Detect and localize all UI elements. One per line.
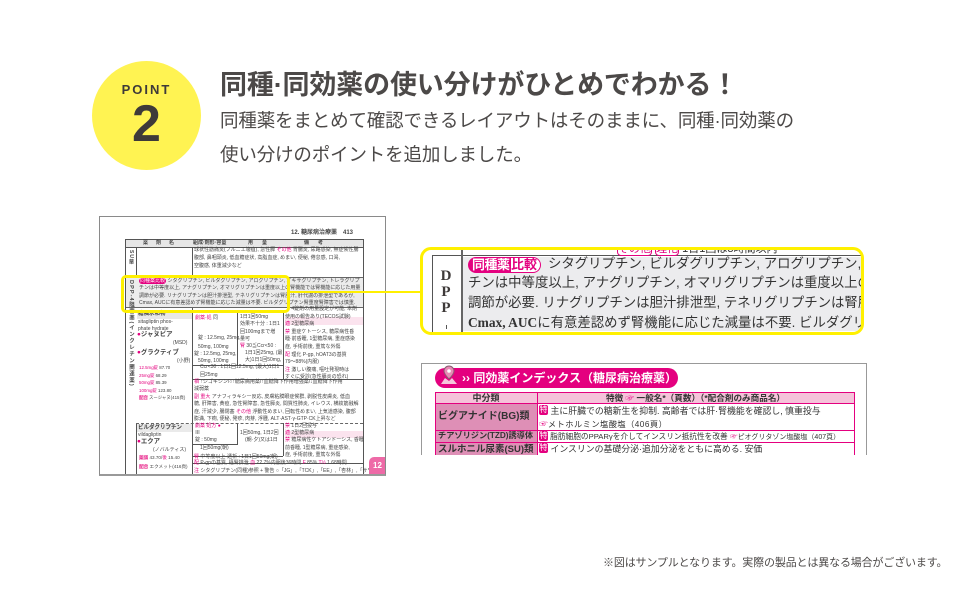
category SU: スルホニル尿素(SU)類 xyxy=(438,444,534,455)
description xyxy=(220,110,794,164)
remarks column xyxy=(285,317,363,325)
panel: book page: 1日1回25mg, (最 xyxy=(245,350,283,356)
header row xyxy=(436,393,854,404)
drug column: vildagliptin xyxy=(138,432,161,438)
panel: drug index xyxy=(421,363,867,455)
comparison text xyxy=(468,256,861,330)
footnote: ※図はサンプルとなります。実際の製品とは異なる場合がございます。 xyxy=(603,557,947,569)
row BG text xyxy=(539,405,821,428)
comparison small text: 同種薬比較 シタグリプチン, ビルダグリプチン, アログリプチン, オキサグリプチン, トレラグリプ xyxy=(140,278,360,284)
panel: book page: 症, 手術前後, 重篤な外傷 xyxy=(285,452,341,458)
drug column: 100mg錠 123.80 xyxy=(139,388,171,393)
vildagliptin usage xyxy=(240,430,279,443)
panel: book page: 症, 汗減少, 腸閉塞 その他 浮動性めまい, 回転性めまい, 上気道感染, 腹部 xyxy=(194,409,356,415)
panel: book page: 注 シタグリプチン(同種)参照 + 警告 ○「JG」,「TCK」,「EE」,「杏林」,「サワイ」 xyxy=(194,468,382,474)
vildagliptin dosage: 劇薬 処方 ● xyxy=(195,423,221,429)
comparison small text: 調節が必要. リナグリプチンは胆汁排泄型, テネリグリプチンは腎胆汁, 肝代謝の排泄型であるが, xyxy=(139,293,355,299)
drug column: ●グラクティブ xyxy=(137,349,179,356)
row SU text: 特 xyxy=(540,443,548,452)
column divider xyxy=(537,393,538,456)
panel: book page: 錠 : 12.5mg, 25mg, xyxy=(194,351,237,357)
comparison tag xyxy=(468,257,541,273)
panel: book page: 使用の報告あり(TECOS試験) xyxy=(285,314,351,320)
panel: book page: 適 2型糖尿病 xyxy=(285,430,314,436)
panel: book page: すぐに受診(急性膵炎の恐れ) xyxy=(285,374,348,380)
panel: book page: 注 激しい腹痛, 嘔吐発現時は xyxy=(285,367,349,373)
panel: book page: 配 P-gpの基質, 経腎排泄 血 22.7%内服後36時間 F 85% T½ 1.68時間 xyxy=(194,460,347,466)
panel: book page: 症, 手術前後, 重篤な外傷 xyxy=(285,344,341,350)
renal dosage line: 回25mg xyxy=(200,372,218,378)
row TZD text: 特 xyxy=(540,431,548,440)
category BG: ビグアナイド(BG)類 xyxy=(438,411,529,422)
page header: 12. 糖尿病治療薬 413 xyxy=(291,230,353,236)
renal dosage line: Ccr<30 : 1日1回12.5mg, (最大)1日1 xyxy=(200,364,279,370)
panel: book page: 大)1日1回50mg, xyxy=(245,357,281,363)
drug column: 12.5mg錠 87.70 xyxy=(139,365,170,370)
table header: 用量 xyxy=(248,240,276,246)
table header: 組成·剤形·容量 xyxy=(193,240,226,246)
page number tab xyxy=(369,457,386,475)
panel: book page: 睡·前昏睡, 1型糖尿病, 重症感染 xyxy=(285,336,355,342)
usage column: 効果不十分 : 1日1 xyxy=(240,321,280,327)
drug column: ●エクア xyxy=(137,438,160,445)
column rule xyxy=(461,250,462,332)
drug column: 配合 エクメット(416頁) xyxy=(139,464,188,468)
page number tab: 12 xyxy=(373,461,382,470)
comparison small text xyxy=(139,278,360,306)
panel: book page: 1回50mg(朝) xyxy=(200,445,229,451)
table rule lines xyxy=(125,248,126,475)
table top line xyxy=(432,255,862,256)
panel: book page: 79〜88%(内服) xyxy=(285,359,319,365)
hyphen mark xyxy=(446,325,447,329)
tag white part: 比較 xyxy=(511,257,537,272)
table header: 備考 xyxy=(304,240,332,246)
panel: book page: 適 2型糖尿病 xyxy=(285,321,314,327)
upper side effects text: 腹部, 鼻咽頭炎, 低血糖症状, 高脂血症, めまい, 便秘, 倦怠感, 口渇, xyxy=(194,255,340,261)
top vertical label: SU薬 xyxy=(128,250,134,265)
table header xyxy=(125,239,364,248)
left rule xyxy=(432,255,433,332)
comparison small text: Cmax, AUCに有意差認めず腎機能に応じた減量は不要. ビルダグリプチン腎重度腎障害では慎重. xyxy=(139,300,355,306)
panel: book page: 膨満, 下痢, 便秘, 発疹, 肉芽, 浮腫, ALT·AST·γ-GTP·CK上昇など xyxy=(194,416,336,422)
panel: enlarged comparison text xyxy=(420,247,864,335)
panel: book page: 腎 30≦Ccr<50 : xyxy=(240,343,276,349)
row BG text: 特 xyxy=(540,405,548,414)
tag label: 同種薬 xyxy=(472,257,510,272)
point label: POINT xyxy=(122,82,171,97)
interactions and side effects: 相 ↑ジゴキシン/○↑糖尿病用薬/↑血糖降下作用増強薬/↓血糖降下作用 xyxy=(194,379,343,385)
category column xyxy=(436,404,537,456)
vertical label DPP xyxy=(440,268,451,316)
drug column: sitagliptin phos- xyxy=(138,319,173,325)
panel: book page: 4錠剤の用量設定が可能, 本剤 xyxy=(291,306,357,312)
drug column: (MSD) xyxy=(173,340,187,346)
small yellow highlight xyxy=(121,275,290,313)
panel: book page: 禁 重症ケトーシス, 糖尿病性昏 xyxy=(285,329,354,335)
drug column xyxy=(137,310,192,469)
usage column xyxy=(240,314,280,342)
upper side effects text: 球状性筋痛炎(フルニエ壊疽), 急性膵 その他 胃腸炎, 尿路感染, 無症候性腸 xyxy=(194,247,358,253)
drug column: phate hydrate xyxy=(138,326,169,332)
drug column: 配合 スージャヌ(415頁) xyxy=(139,395,185,400)
highlighted comparison block xyxy=(126,277,363,308)
upper side effects text xyxy=(194,246,358,269)
row SU text: インスリンの基礎分泌·追加分泌をともに高める. 安価 xyxy=(550,444,762,454)
point badge xyxy=(92,61,201,170)
vertical label DPP: P xyxy=(441,300,451,316)
panel: book page: 前昏睡, 1型糖尿病, 重症感染, xyxy=(285,445,350,451)
panel: book page: 禁 1日2回投与 xyxy=(285,423,317,429)
panel: book page: 錠 : 12.5mg, 25mg, xyxy=(198,335,241,341)
panel: book page: 50mg, 100mg xyxy=(198,358,229,364)
vildagliptin remarks xyxy=(285,431,363,438)
row line 1 xyxy=(436,430,854,431)
comparison small text: チンは中等度以上, アナグリプチン, オマリグリプチンは重度以上の腎機能では腎機能に応じた用量 xyxy=(139,285,360,291)
usage column: 量可 xyxy=(240,336,250,342)
panel: book page: 禁 糖尿病性ケトアシドーシス, 昏睡 xyxy=(285,437,364,443)
vildagliptin dosage: 錠 : 50mg xyxy=(195,437,217,443)
vertical label DPP: D xyxy=(441,268,451,284)
index title text: ›› 同効薬インデックス（糖尿病治療薬） xyxy=(462,371,677,385)
point number: 2 xyxy=(132,95,161,153)
drug column: ●ジャヌビア xyxy=(137,331,173,338)
icon: map pin xyxy=(441,366,457,384)
panel: book page: 腎 中等度以上·透析 : 1日1回50mg(朝) xyxy=(194,454,278,460)
drug column: 糖隣水和物 xyxy=(138,311,166,317)
drug column: 50mg錠 85.39 xyxy=(139,380,167,385)
vildagliptin usage: 1回50mg, 1日2回 xyxy=(240,430,279,436)
panel: book page: 配 理化 P-gp, hOAT3の基質 xyxy=(285,352,347,358)
vildagliptin usage: (朝·夕)又は1日 xyxy=(245,437,278,443)
upper side effects text: 空腹感, 体重減少など xyxy=(194,263,242,269)
heading: 同種·同効薬の使い分けがひとめでわかる！ xyxy=(220,70,738,100)
description: 使い分けのポイントを追加しました。 xyxy=(220,144,532,164)
interactions and side effects: 減弱薬 xyxy=(194,386,209,392)
usage column: 回100mgまで増 xyxy=(240,329,275,335)
usage column: 1日1回50mg xyxy=(240,314,268,320)
header col 1: 中分類 xyxy=(472,393,500,403)
connector line xyxy=(289,291,421,293)
drug column: (ノバルティス) xyxy=(153,447,186,453)
drug column: (小野) xyxy=(177,358,190,364)
vildagliptin dosage xyxy=(195,422,221,443)
panel: book page: 50mg, 100mg xyxy=(198,344,229,350)
drug column: ビルダグリプチン xyxy=(138,425,182,431)
grey highlight background xyxy=(462,257,861,331)
row line 2 xyxy=(436,442,854,443)
row TZD text: 脂肪細胞のPPARγを介してインスリン抵抗性を改善 ☞ピオグリタゾン塩酸塩（407頁） xyxy=(550,432,840,441)
index table xyxy=(435,392,855,455)
panel: book page: 糖, 肝障害, 黄疸, 急性腎障害, 急性膵炎, 間質性肺炎, イレウス, 横紋筋融解 xyxy=(194,401,358,407)
vertical label DPP: P xyxy=(441,284,451,300)
header col 2: 特徴 ☞ 一般名*（頁数）（*配合剤のみ商品名） xyxy=(606,393,785,403)
dosage column: 劇薬·処 同 xyxy=(195,315,218,321)
vertical category label: DPP-4阻害薬(インクレチン関連薬) xyxy=(128,280,134,387)
interactions and side effects xyxy=(194,378,343,392)
row BG text: ☞メトホルミン塩酸塩（406頁） xyxy=(539,418,667,428)
panel: book page xyxy=(99,216,386,476)
row BG text: 主に肝臓での糖新生を抑制. 高齢者では肝·腎機能を確認し, 慎重投与 xyxy=(550,406,821,416)
index title bar xyxy=(435,368,678,388)
renal dosage line xyxy=(200,364,280,378)
vildagliptin dosage: Ⅲ xyxy=(195,430,200,436)
category TZD: チアゾリジン(TZD)誘導体 xyxy=(438,431,533,440)
drug column: 25mg錠 68.29 xyxy=(139,373,167,378)
description: 同種薬をまとめて確認できるレイアウトはそのままに、同種·同効薬の xyxy=(220,110,794,131)
panel: book page: 副 重大 アナフィラキシー反応, 皮膚粘膜眼症候群, 剥脱性皮膚炎, 低血 xyxy=(194,394,350,400)
drug column: 薬価 43.70/後 15.40 xyxy=(139,455,180,460)
table header: 薬剤名 xyxy=(143,240,182,246)
